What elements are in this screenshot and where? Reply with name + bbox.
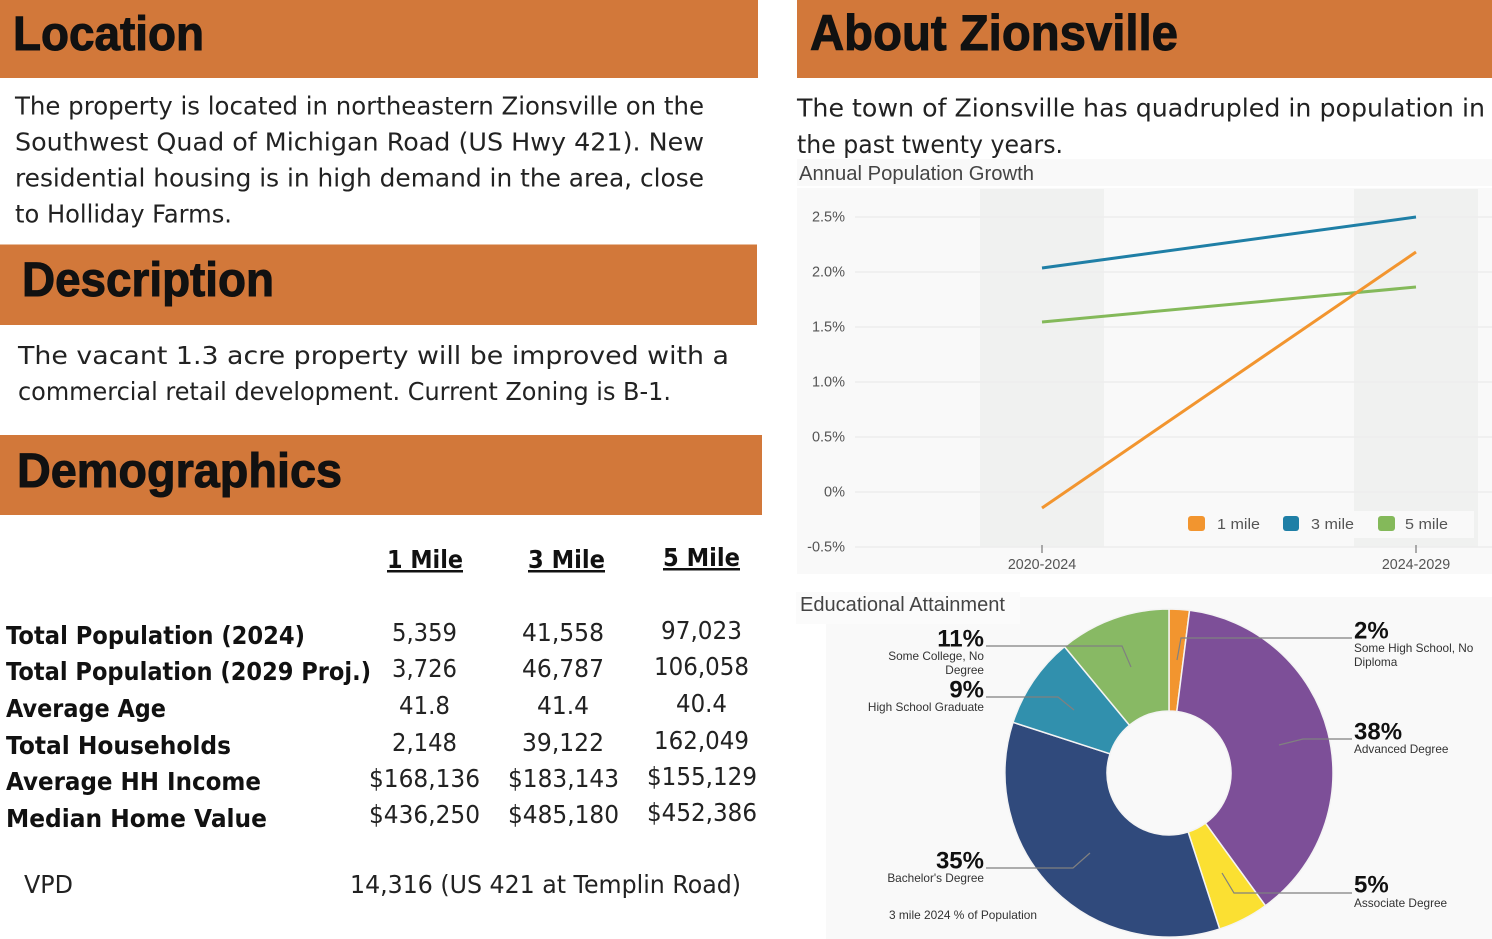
table values: 1 mile — [369, 618, 480, 829]
heading: Demographics: Demographics — [17, 445, 342, 498]
label: 35% — [887, 848, 984, 885]
legend: 5 mile — [1405, 516, 1448, 533]
text block: location description: residential housing is in high demand in the area, close — [15, 164, 704, 192]
text block: location description: The property is located in northeastern Zionsville on the — [14, 92, 704, 120]
heading: Location: Location — [13, 8, 204, 61]
table row labels: Total Population (2024) — [6, 621, 305, 650]
label: 5%: Associate Degree — [1354, 896, 1448, 910]
chart title: Annual Population Growth — [799, 163, 1034, 185]
table values: 1 mile: $168,136 — [369, 764, 480, 793]
table column headers: 1 Mile — [387, 545, 463, 574]
label: 2%: Some High School, No — [1354, 641, 1474, 655]
legend: 3 mile — [1311, 516, 1354, 533]
label: 35%: Bachelor's Degree — [887, 871, 984, 885]
table values: 3 mile: 41,558 — [522, 618, 604, 647]
table row labels: Average HH Income — [6, 767, 261, 796]
table values: 5 mile: 162,049 — [654, 726, 749, 755]
table values: 1 mile: 41.8 — [399, 691, 450, 720]
label: 5%: 5% — [1354, 872, 1389, 898]
table values: 3 mile: 41.4 — [537, 691, 589, 720]
heading: About Zionsville: About Zionsville — [810, 5, 1178, 61]
y axis labels: 0.5% — [812, 430, 845, 446]
leader lines — [986, 638, 1352, 893]
table row labels: Average Age — [6, 694, 166, 723]
series: 5 mile — [1042, 287, 1416, 322]
table row labels — [6, 621, 371, 833]
table values: 1 mile: 3,726 — [392, 654, 457, 683]
text block: property description: The vacant 1.3 acre property will be improved with a — [17, 341, 729, 370]
heading: About Zionsville — [797, 0, 1492, 78]
table row labels: Median Home Value — [6, 804, 267, 833]
y axis labels — [807, 210, 845, 556]
slice: some high school 2% — [1169, 609, 1190, 711]
note: 3 mile population: 3 mile 2024 % of Population — [889, 908, 1037, 922]
text block: about — [796, 94, 1485, 159]
label: 35%: 35% — [936, 848, 984, 874]
table values: 3 mile — [508, 618, 619, 829]
heading: Description — [0, 244, 757, 325]
label: 38%: 38% — [1354, 718, 1402, 746]
heading: Location — [0, 0, 758, 78]
label: 9%: 9% — [949, 676, 984, 704]
series: 3 mile — [1042, 217, 1416, 268]
table values: 5 mile: $452,386 — [647, 798, 757, 827]
text block: about: The town of Zionsville has quadrupled in population in — [796, 94, 1485, 122]
slice: some college 11% — [1064, 609, 1169, 725]
panel: description — [0, 244, 757, 406]
label: 2%: Diploma — [1354, 655, 1398, 669]
table values: 3 mile: $183,143 — [508, 764, 619, 793]
table values: 5 mile — [647, 616, 757, 827]
slice: high school graduate 9% — [1013, 647, 1129, 754]
panel: location — [0, 0, 758, 228]
panel: demographics — [0, 435, 762, 899]
table values: 5 mile: $155,129 — [647, 762, 757, 791]
VPD row: VPD — [24, 870, 73, 899]
label: 11%: Some College, No — [888, 649, 984, 663]
label: 2%: 2% — [1354, 618, 1389, 644]
y axis labels: 1.0% — [812, 374, 845, 390]
x axis labels: 2020-2024 — [1008, 557, 1076, 573]
label: 9%: High School Graduate — [868, 700, 984, 714]
panel: about Zionsville — [796, 0, 1492, 159]
label: 11%: Degree — [945, 663, 984, 677]
y axis labels: 2.5% — [812, 210, 845, 226]
y axis labels: 1.5% — [812, 320, 845, 336]
table column headers — [387, 543, 740, 574]
legend: 1 mile — [1217, 516, 1260, 533]
y axis labels: 2.0% — [812, 264, 845, 280]
label: 11% — [888, 626, 984, 677]
label: 9% — [868, 676, 984, 714]
label: 38% — [1354, 718, 1449, 756]
table values: 3 mile: 46,787 — [522, 654, 604, 683]
y axis labels: 0% — [824, 484, 845, 500]
label: 38%: Advanced Degree — [1354, 742, 1449, 756]
table row labels: Total Population (2029 Proj.) — [6, 657, 371, 686]
label: 5% — [1354, 872, 1448, 910]
donut chart: educational attainment — [796, 592, 1492, 939]
label: 2% — [1354, 618, 1474, 669]
slice: advanced degree 38% — [1177, 610, 1333, 906]
legend — [1178, 511, 1474, 538]
x axis labels: 2024-2029 — [1382, 557, 1450, 573]
line chart: annual population growth — [797, 159, 1492, 574]
table column headers: 3 Mile — [528, 545, 605, 574]
table column headers: 5 Mile — [663, 543, 740, 572]
y axis labels: -0.5% — [807, 540, 845, 556]
table values: 5 mile: 97,023 — [661, 616, 742, 645]
VPD row — [24, 870, 741, 899]
table values: 3 mile: $485,180 — [508, 800, 619, 829]
VPD row: 14,316 (US 421 at Templin Road) — [350, 870, 741, 899]
label: 11%: 11% — [937, 626, 984, 652]
slice: associate degree 5% — [1188, 823, 1265, 929]
heading: Demographics — [0, 435, 762, 515]
heading: Description: Description — [22, 254, 274, 307]
table row labels: Total Households — [6, 731, 231, 760]
text block: property description — [17, 341, 729, 406]
text block: location description: Southwest Quad of Michigan Road (US Hwy 421). New — [15, 128, 704, 156]
text block: location description — [14, 92, 704, 228]
table values: 5 mile: 106,058 — [654, 652, 749, 681]
text block: about: the past twenty years. — [797, 130, 1063, 159]
table values: 1 mile: 2,148 — [392, 728, 457, 757]
table values: 5 mile: 40.4 — [676, 689, 727, 718]
x axis labels — [1008, 545, 1450, 573]
table values: 1 mile: 5,359 — [392, 618, 457, 647]
text block: property description: commercial retail development. Current Zoning is B-1. — [18, 377, 671, 406]
chart title: Educational Attainment — [800, 594, 1005, 616]
table values: 1 mile: $436,250 — [369, 800, 480, 829]
table values: 3 mile: 39,122 — [522, 728, 604, 757]
slice: bachelor's degree 35% — [1005, 722, 1220, 937]
series: 1 mile — [1042, 252, 1416, 508]
text block: location description: to Holliday Farms. — [15, 200, 232, 228]
